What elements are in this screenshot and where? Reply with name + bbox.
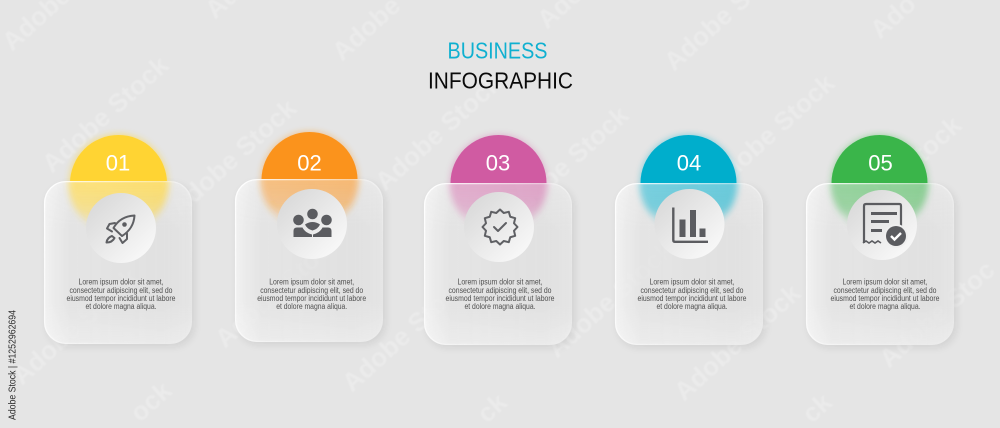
- title: INFOGRAPHIC: [428, 68, 573, 94]
- icon: team: [277, 189, 347, 259]
- text: step 03: consectetur adipiscing elit, sed do: [448, 286, 552, 295]
- text: step 01: consectetur adipiscing elit, sed do: [70, 286, 173, 295]
- text: step 01: [66, 278, 176, 311]
- icon: quality badge: [464, 192, 534, 262]
- number badge 04: [640, 135, 736, 183]
- watermarks: ock: [124, 375, 178, 427]
- watermarks: Adobe Stock: [541, 234, 680, 363]
- text: step 04: consectetur adipiscing elit, sed do: [640, 286, 744, 295]
- title: BUSINESS: [448, 38, 548, 64]
- text: step 04: eiusmod tempor incididunt ut labore: [638, 294, 747, 303]
- text: step 03: eiusmod tempor incididunt ut labore: [446, 294, 555, 303]
- text: step 03: et dolore magna aliqua.: [464, 302, 536, 311]
- number badge 01: [70, 135, 167, 181]
- text: step 02: eiusmod tempor incididunt ut labore: [257, 294, 367, 303]
- text: step 05: Lorem ipsum dolor sit amet,: [842, 278, 928, 286]
- panel: step 05: [806, 134, 957, 348]
- watermarks: Adobe Stock: [829, 109, 968, 238]
- number badge 03: [450, 135, 546, 183]
- number badge 05: [832, 135, 928, 183]
- panel: step 04: [615, 134, 766, 348]
- watermarks: Adobe Stock: [36, 49, 175, 178]
- title: [428, 38, 573, 94]
- text: step 04: et dolore magna aliqua.: [656, 302, 728, 311]
- text: step 02: [257, 278, 367, 311]
- watermarks: Adobe Stock: [164, 92, 303, 221]
- text: step 04: [638, 278, 747, 311]
- watermarks: ck: [471, 386, 513, 428]
- watermarks: Adobe Stock: [702, 67, 841, 196]
- watermarks: Adobe Stock: [369, 67, 508, 196]
- icon: bar chart: [654, 189, 724, 259]
- text: step 02: consectetur adipiscing elit, sed do: [260, 286, 364, 295]
- icon: rocket: [86, 193, 156, 263]
- text: step 03: Lorem ipsum dolor sit amet,: [458, 278, 542, 286]
- text: step 03: [446, 278, 555, 311]
- watermarks: ck: [796, 386, 838, 428]
- icon: approved receipt: [847, 190, 917, 260]
- watermarks: Adobe Stock: [668, 277, 807, 406]
- text: step 01: Lorem ipsum dolor sit amet,: [78, 278, 164, 286]
- panel: step 02: [235, 131, 386, 345]
- number badge 01: 01: [106, 150, 130, 176]
- watermarks: Adobe Stock: [496, 99, 635, 228]
- panel: step 01: [44, 134, 195, 347]
- watermarks: Adobe Stoc: [873, 255, 1000, 373]
- number badge 02: [262, 132, 358, 179]
- watermarks: Adobe Stock: [209, 224, 348, 353]
- text: step 05: consectetur adipiscing elit, sed do: [834, 286, 937, 295]
- stock id label: Adobe Stock | #1252962694: [6, 310, 18, 420]
- text: step 02: et dolore magna aliqua.: [276, 302, 347, 311]
- text: step 05: eiusmod tempor incididunt ut labore: [830, 294, 940, 303]
- number badge 05: 05: [868, 150, 893, 176]
- number badge 03: 03: [486, 150, 510, 176]
- panel: step 03: [424, 134, 575, 348]
- text: step 05: [830, 278, 940, 311]
- text: step 01: eiusmod tempor incididunt ut labore: [66, 294, 176, 303]
- watermarks: Adobe Stock: [6, 261, 145, 390]
- text: step 01: et dolore magna aliqua.: [86, 302, 156, 311]
- number badge 02: 02: [297, 150, 322, 176]
- text: step 02: Lorem ipsum dolor sit amet,: [269, 278, 354, 286]
- number badge 04: 04: [677, 150, 701, 176]
- watermarks: Adobe Stock: [336, 268, 475, 397]
- text: step 05: et dolore magna aliqua.: [850, 302, 920, 311]
- text: step 04: Lorem ipsum dolor sit amet,: [650, 278, 734, 286]
